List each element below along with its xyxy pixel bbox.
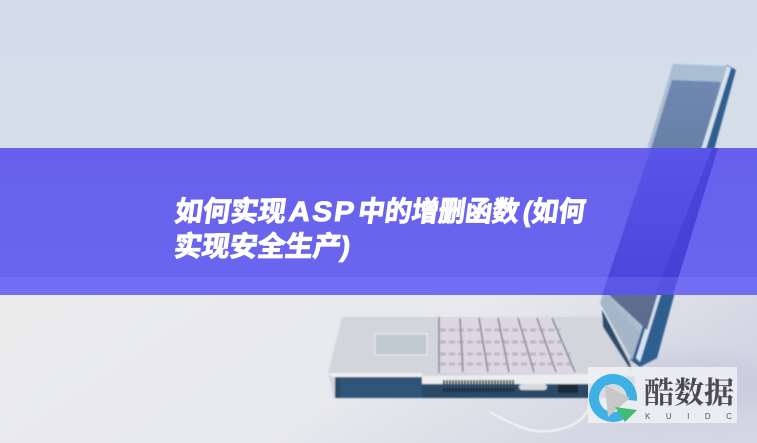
vents <box>443 382 514 390</box>
logo backing panel <box>588 367 737 423</box>
port <box>558 384 578 393</box>
keyboard <box>438 317 577 373</box>
purple title band <box>0 148 757 295</box>
logo subtitle: KUIDC <box>645 412 747 421</box>
title: (如何 <box>521 196 587 227</box>
logo wordmark: 酷数据 <box>644 368 734 412</box>
title: ASP <box>287 196 358 227</box>
touchpad <box>375 334 427 355</box>
lighter lower strip of band <box>0 277 757 295</box>
title: 实现安全生产) <box>172 231 353 262</box>
title <box>168 196 587 262</box>
cable <box>490 405 590 431</box>
laptop base <box>328 317 640 398</box>
laptop photo illustration <box>328 64 736 431</box>
watermark logo <box>588 367 747 423</box>
lid dark edge through band <box>655 148 718 295</box>
title: 中的增删函数 <box>356 196 521 227</box>
title: 如何实现 <box>173 196 288 227</box>
laptop lid <box>600 64 736 372</box>
lid seen through band <box>602 148 718 295</box>
power button <box>519 384 547 390</box>
icon: blue play ring <box>588 373 638 423</box>
